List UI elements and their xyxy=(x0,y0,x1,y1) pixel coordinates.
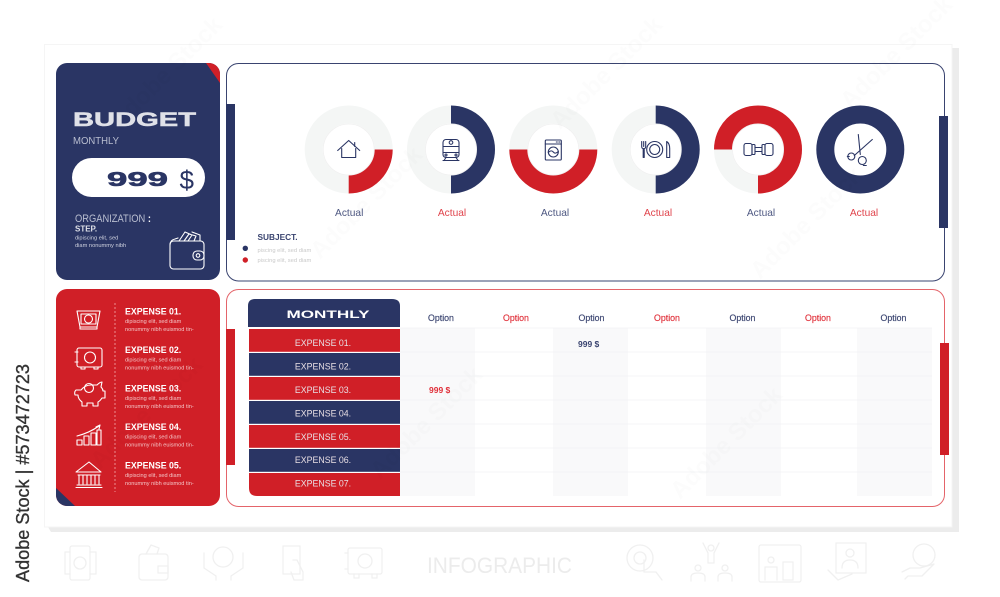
right red tab xyxy=(940,343,949,455)
footer: faded icon strip xyxy=(65,543,935,582)
row: expense 07: EXPENSE 07. xyxy=(295,478,351,488)
icon: faded safe xyxy=(345,548,382,578)
legend: subject xyxy=(243,232,311,264)
expense 05: dipiscing elit, sed diam xyxy=(125,473,182,479)
expense 04: EXPENSE 04. xyxy=(125,422,181,432)
label: actual: Actual xyxy=(335,208,363,219)
expense 05: EXPENSE 05. xyxy=(125,460,181,470)
amount pill: 999 xyxy=(107,169,168,191)
row: expense 06 xyxy=(249,449,400,472)
donut 1: home xyxy=(314,114,384,219)
icon: faded phone touch xyxy=(283,546,303,580)
row: expense 03 xyxy=(249,377,400,400)
expense 04 xyxy=(125,422,194,448)
panel: budget summary xyxy=(56,63,220,280)
table header: monthly xyxy=(248,299,400,327)
icon: faded wallet xyxy=(139,545,168,580)
table value: red: 999 $ xyxy=(429,385,451,395)
expense 05 xyxy=(125,460,194,487)
label: actual: Actual xyxy=(850,208,878,219)
expense 01 xyxy=(125,306,194,333)
icon: plate and cutlery xyxy=(642,142,670,158)
icon: faded hand with coin xyxy=(902,544,935,579)
row: expense 03: EXPENSE 03. xyxy=(295,385,351,395)
expense 02 xyxy=(125,345,194,372)
icon: faded phone payment xyxy=(65,546,96,580)
table column headers: Option xyxy=(730,313,756,323)
row: expense 06: EXPENSE 06. xyxy=(295,455,351,465)
panel: expense list xyxy=(56,289,220,506)
right navy tab xyxy=(939,116,948,228)
icon: piggy bank xyxy=(75,382,105,406)
row: expense 02: EXPENSE 02. xyxy=(295,362,351,372)
icon: faded puzzle xyxy=(759,545,801,582)
row: expense 04: EXPENSE 04. xyxy=(295,408,351,418)
table column headers xyxy=(428,313,907,323)
icon: faded hand holding profile xyxy=(828,543,866,580)
expense 03: dipiscing elit, sed diam xyxy=(125,396,182,402)
legend: subject: SUBJECT. xyxy=(258,232,298,242)
label: actual: Actual xyxy=(438,208,466,219)
icon: dumbbell xyxy=(744,144,773,156)
amount pill xyxy=(72,158,205,197)
icon: atm cash xyxy=(77,311,100,329)
legend: subject: piscing elit, sed diam xyxy=(258,258,311,264)
monthly label: MONTHLY xyxy=(73,135,119,147)
stock attribution: Adobe Stock | #573472723 xyxy=(13,364,33,582)
icon: safe xyxy=(75,348,102,369)
donut 3: washing machine xyxy=(518,114,588,219)
watermark text xyxy=(85,0,958,504)
table column shading xyxy=(400,328,932,496)
table column headers: Option xyxy=(503,313,529,323)
row: expense 04 xyxy=(249,401,400,424)
expense 04: dipiscing elit, sed diam xyxy=(125,434,182,440)
icon: faded gear and hand xyxy=(627,545,662,580)
organization text block: STEP. xyxy=(75,224,97,234)
table column headers: Option xyxy=(654,313,680,323)
left red tab xyxy=(226,329,235,465)
organization text block: dipiscing elit, sed xyxy=(75,236,118,242)
expense 05: nonummy nibh euismod tin- xyxy=(125,481,194,487)
table column headers: Option xyxy=(881,313,907,323)
navy corner accent xyxy=(56,488,75,506)
budget heading: BUDGET xyxy=(73,109,196,131)
expense 01: nonummy nibh euismod tin- xyxy=(125,327,194,333)
donut 4: dining xyxy=(621,114,691,219)
expense 04: nonummy nibh euismod tin- xyxy=(125,442,194,448)
row: expense 05: EXPENSE 05. xyxy=(295,432,351,442)
expense 03: nonummy nibh euismod tin- xyxy=(125,404,194,410)
icon: growth chart xyxy=(77,425,101,445)
icon: scissors xyxy=(847,134,872,166)
label: actual: Actual xyxy=(747,208,775,219)
table header: monthly: MONTHLY xyxy=(286,309,371,321)
label: actual: Actual xyxy=(541,208,569,219)
table column headers: Option xyxy=(579,313,605,323)
donut 6: scissors xyxy=(825,114,895,219)
icon: wallet xyxy=(170,232,204,269)
icon: washing machine xyxy=(545,140,561,160)
organization text block: ORGANIZATION : xyxy=(75,213,151,225)
sheet background card with shadow xyxy=(44,44,959,532)
row: expense 02 xyxy=(249,353,400,376)
organization text block xyxy=(75,213,151,249)
amount pill: $ xyxy=(180,165,194,195)
label: actual: Actual xyxy=(644,208,672,219)
table column headers: Option xyxy=(428,313,454,323)
panel: donut charts xyxy=(226,64,948,281)
panel: monthly table xyxy=(226,290,949,506)
left navy tab xyxy=(226,104,235,240)
donut 5: dumbbell xyxy=(723,114,793,219)
heading: infographic: INFOGRAPHIC xyxy=(427,553,572,578)
expense 03 xyxy=(125,384,194,410)
expense 01: dipiscing elit, sed diam xyxy=(125,319,182,325)
row: expense 01 xyxy=(249,329,400,352)
row: expense 01: EXPENSE 01. xyxy=(295,338,351,348)
expense 02: nonummy nibh euismod tin- xyxy=(125,366,194,372)
icon: faded team xyxy=(691,543,732,581)
expense 03: EXPENSE 03. xyxy=(125,384,181,394)
table value: navy: 999 $ xyxy=(578,339,600,349)
row: expense 05 xyxy=(249,425,400,448)
dashed divider xyxy=(114,303,116,492)
icon: house xyxy=(338,140,360,158)
table column headers: Option xyxy=(805,313,831,323)
row: expense 07 xyxy=(249,473,400,496)
red corner accent xyxy=(206,63,220,83)
donut 2: train xyxy=(416,114,486,219)
organization text block: diam nonummy nibh xyxy=(75,243,126,249)
icon: bank building xyxy=(76,462,102,488)
icon: train xyxy=(443,140,459,160)
expense 01: EXPENSE 01. xyxy=(125,306,181,316)
icon: faded hands with coin xyxy=(204,547,243,580)
expense 02: dipiscing elit, sed diam xyxy=(125,358,182,364)
legend: subject: piscing elit, sed diam xyxy=(258,248,311,254)
expense 02: EXPENSE 02. xyxy=(125,345,181,355)
